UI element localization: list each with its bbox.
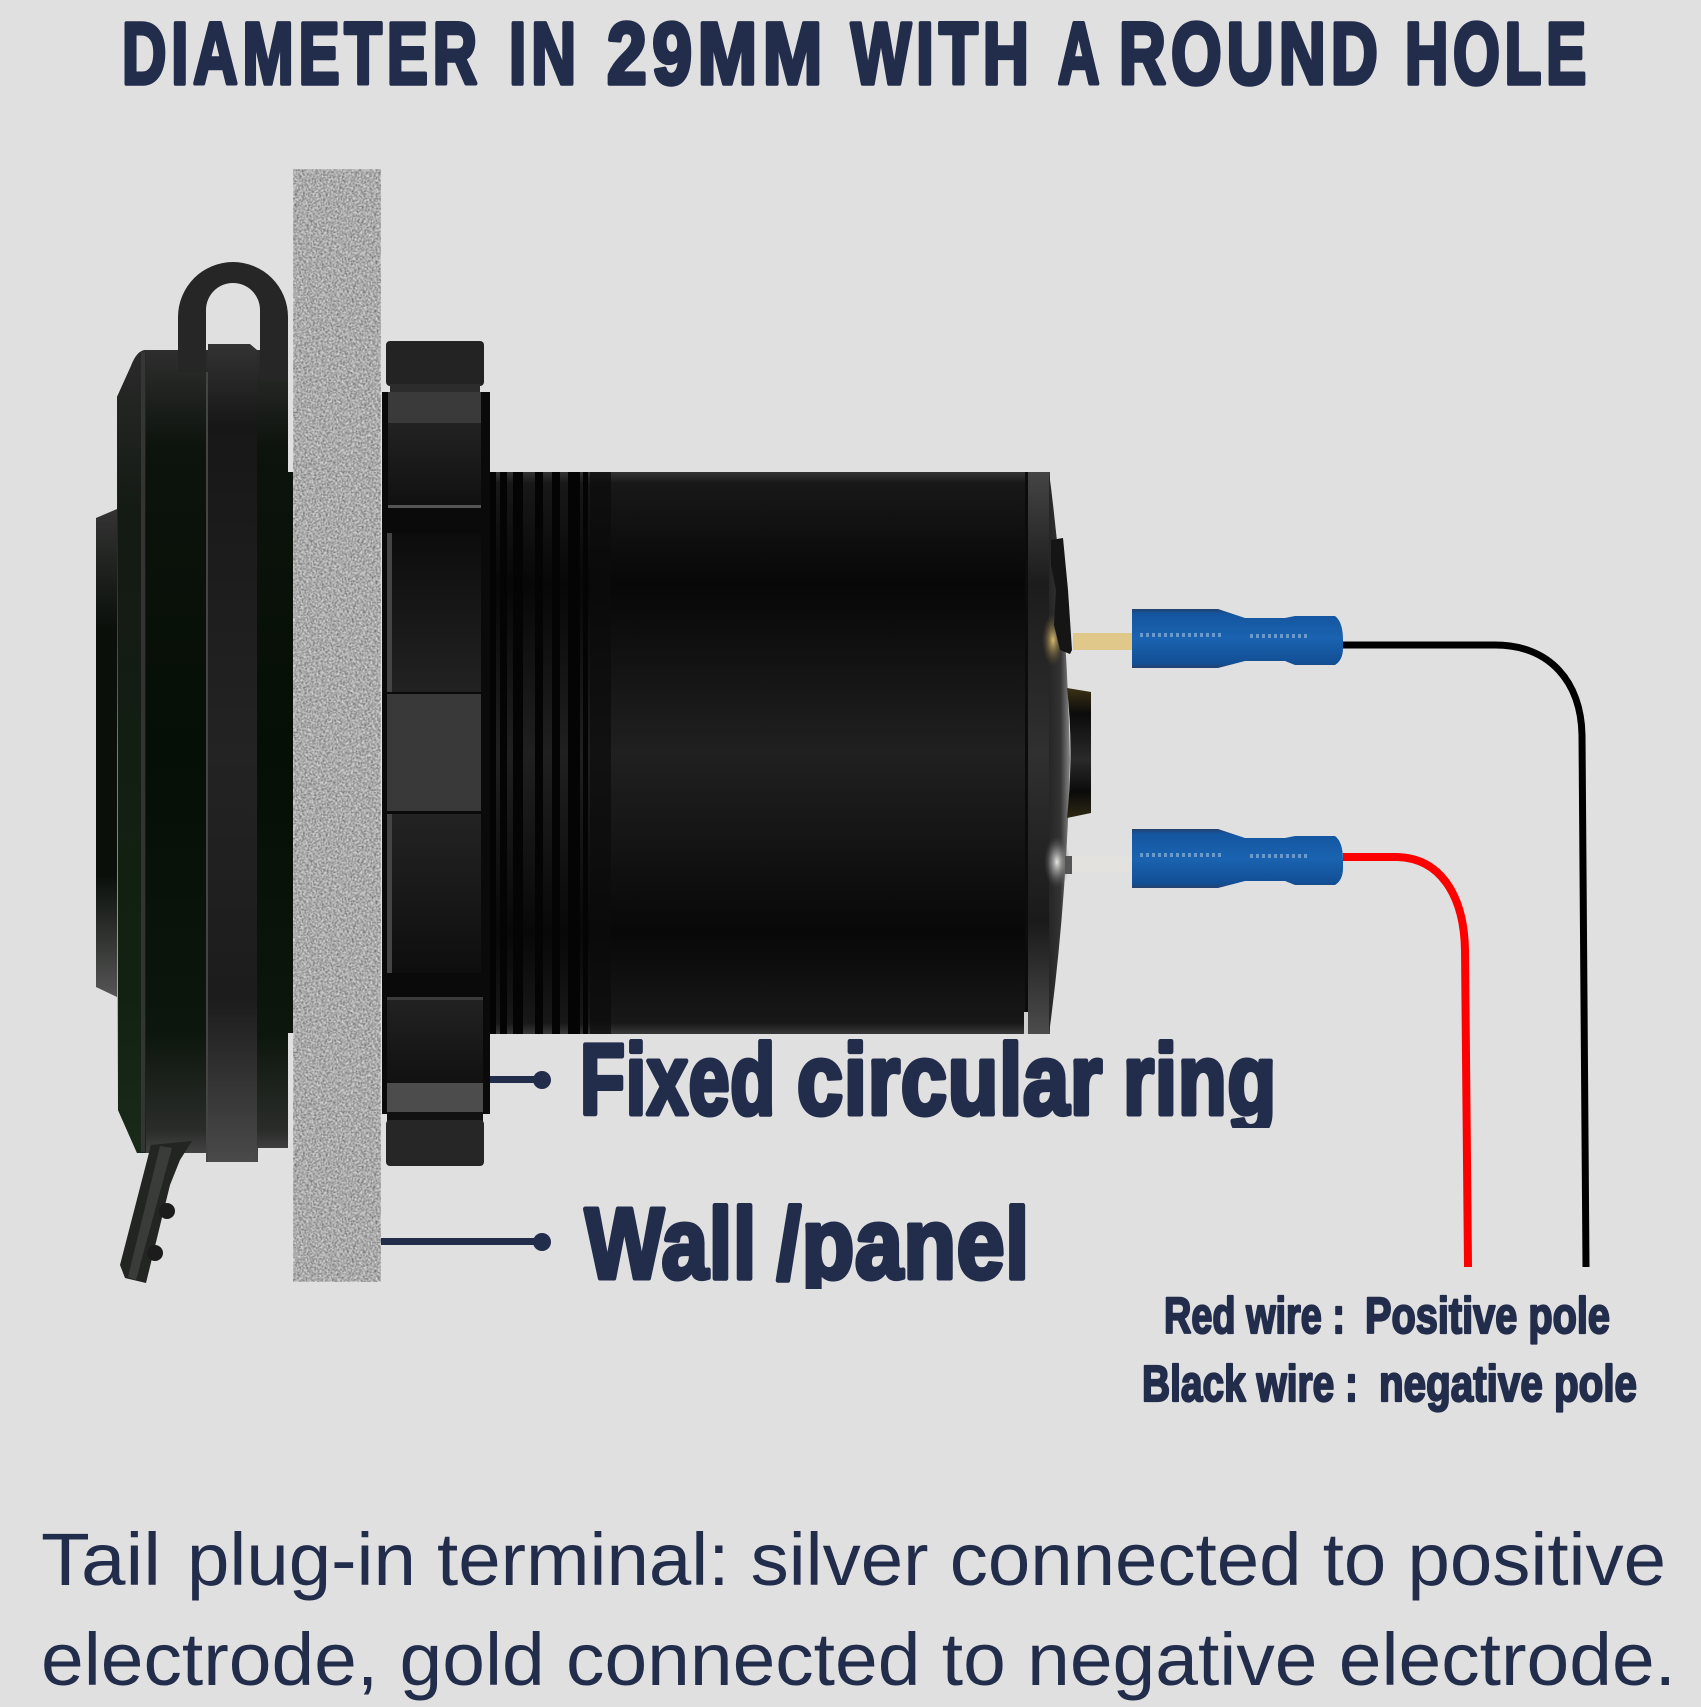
bottom block — [386, 1120, 484, 1166]
title: 29MM — [607, 6, 828, 102]
label — [583, 1039, 1273, 1128]
wall / panel slab — [293, 169, 381, 1282]
wire colour legend: Red wire : — [1164, 1287, 1345, 1344]
leader line — [490, 1071, 551, 1089]
fixed circular ring nut — [382, 341, 490, 1166]
title: IN — [509, 6, 581, 102]
rear push button — [1067, 688, 1091, 818]
cap rim highlight — [117, 350, 146, 1153]
title: HOLE — [1405, 6, 1591, 102]
terminal note: plug-in terminal: silver connected to positive — [187, 1518, 1666, 1601]
black wire — [1343, 645, 1586, 1267]
leader line — [381, 1233, 551, 1251]
callout: fixed circular ring — [490, 1039, 1273, 1128]
label: Fixed — [580, 1024, 776, 1136]
terminal note — [41, 1518, 1676, 1701]
terminal note: Tail — [41, 1518, 161, 1601]
gold pin and black wire terminal — [1073, 609, 1586, 1267]
gold blade — [1073, 633, 1133, 650]
terminal crimp marks — [1140, 635, 1310, 636]
title: DIAMETER — [122, 6, 482, 102]
label: circular — [797, 1024, 1103, 1136]
icon: cap lanyard loop — [178, 262, 288, 380]
terminal note: electrode, gold connected to negative electrode. — [41, 1618, 1676, 1701]
cap strap tab — [120, 1141, 192, 1283]
callout: wall / panel — [381, 1203, 1026, 1289]
title — [122, 6, 1591, 102]
blue crimp terminal — [1132, 829, 1343, 888]
main barrel — [611, 472, 1025, 1034]
label: /panel — [777, 1188, 1030, 1300]
rear terminal block — [1051, 538, 1072, 654]
wire colour legend — [1142, 1287, 1637, 1412]
middle block — [387, 694, 481, 811]
title: ROUND — [1119, 6, 1383, 102]
title: WITH — [851, 6, 1034, 102]
wire colour legend: Black wire : — [1142, 1355, 1358, 1412]
silver pin and red wire terminal — [1065, 829, 1468, 1267]
rear contact glints — [1042, 614, 1070, 888]
cap body — [117, 350, 293, 1162]
terminal crimp marks — [1140, 855, 1310, 856]
thread section — [488, 472, 613, 1034]
red wire — [1343, 857, 1468, 1267]
wire colour legend: Positive pole — [1365, 1287, 1610, 1344]
cap centre strip — [208, 344, 257, 1162]
label: ring — [1123, 1024, 1277, 1136]
socket cap, front side of wall — [96, 262, 293, 1283]
title: A — [1058, 6, 1104, 102]
top block — [386, 341, 484, 386]
silver blade — [1065, 856, 1133, 874]
front lens — [96, 509, 117, 997]
barrel rear end — [1028, 472, 1050, 1034]
label: Wall — [585, 1188, 757, 1300]
blue crimp terminal — [1132, 609, 1343, 668]
threaded cylinder body — [488, 472, 1091, 1034]
label — [583, 1203, 1026, 1289]
wire colour legend: negative pole — [1379, 1355, 1637, 1412]
